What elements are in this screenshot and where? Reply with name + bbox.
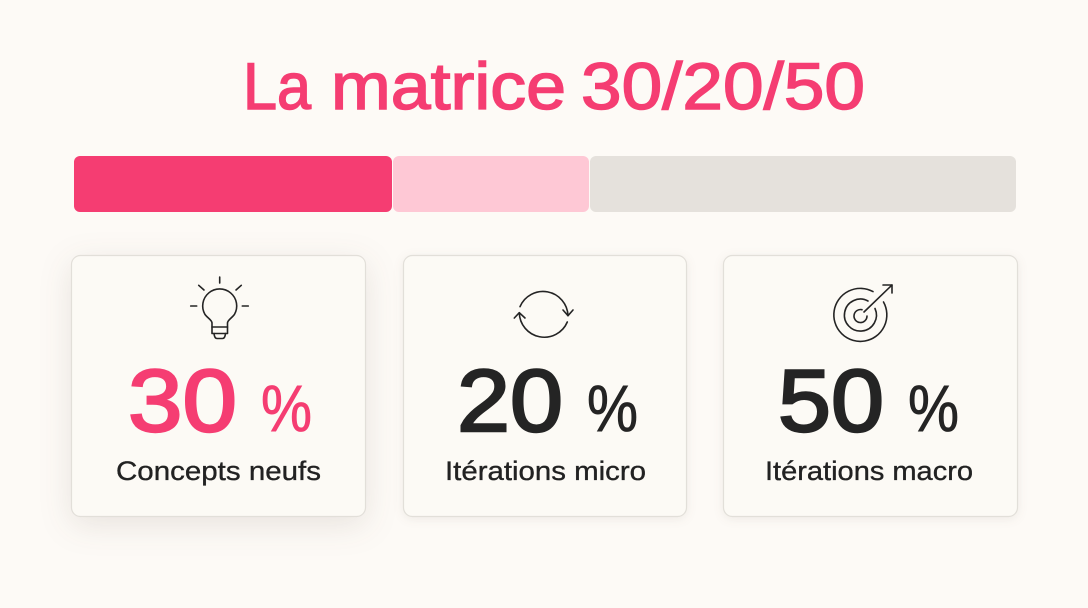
stat: 30 %: % xyxy=(261,371,312,445)
stat: 30 %: 30 xyxy=(128,351,237,450)
panel: concepts neufs xyxy=(72,256,366,516)
label: itérations macro: Itérations macro xyxy=(765,456,973,486)
bar segment: 30% xyxy=(74,156,392,212)
stat: 50 %: 50 xyxy=(778,351,884,450)
title: matrice xyxy=(331,49,566,123)
stat: 50 %: % xyxy=(908,371,959,445)
label: concepts neufs: Concepts neufs xyxy=(116,456,321,486)
card background xyxy=(72,256,366,516)
icon: target with arrow xyxy=(834,285,892,341)
stat: 50 % xyxy=(778,351,959,450)
stat: 20 %: 20 xyxy=(457,351,563,450)
bar segment: 50% xyxy=(590,156,1016,212)
icon: light bulb xyxy=(191,277,248,338)
label: itérations micro: Itérations micro xyxy=(445,456,646,486)
stat: 30 % xyxy=(128,351,312,450)
title: La xyxy=(243,49,311,123)
title: 30/20/50 xyxy=(581,49,865,123)
card background xyxy=(404,256,686,516)
card background xyxy=(724,256,1018,516)
stat: 20 %: % xyxy=(587,371,638,445)
panel: itérations macro xyxy=(724,256,1018,516)
panel: itérations micro xyxy=(404,256,686,516)
stacked proportion bar xyxy=(74,156,1016,212)
bar segment: 20% xyxy=(393,156,589,212)
stat: 20 % xyxy=(457,351,638,450)
icon: cycle arrows xyxy=(514,291,573,337)
